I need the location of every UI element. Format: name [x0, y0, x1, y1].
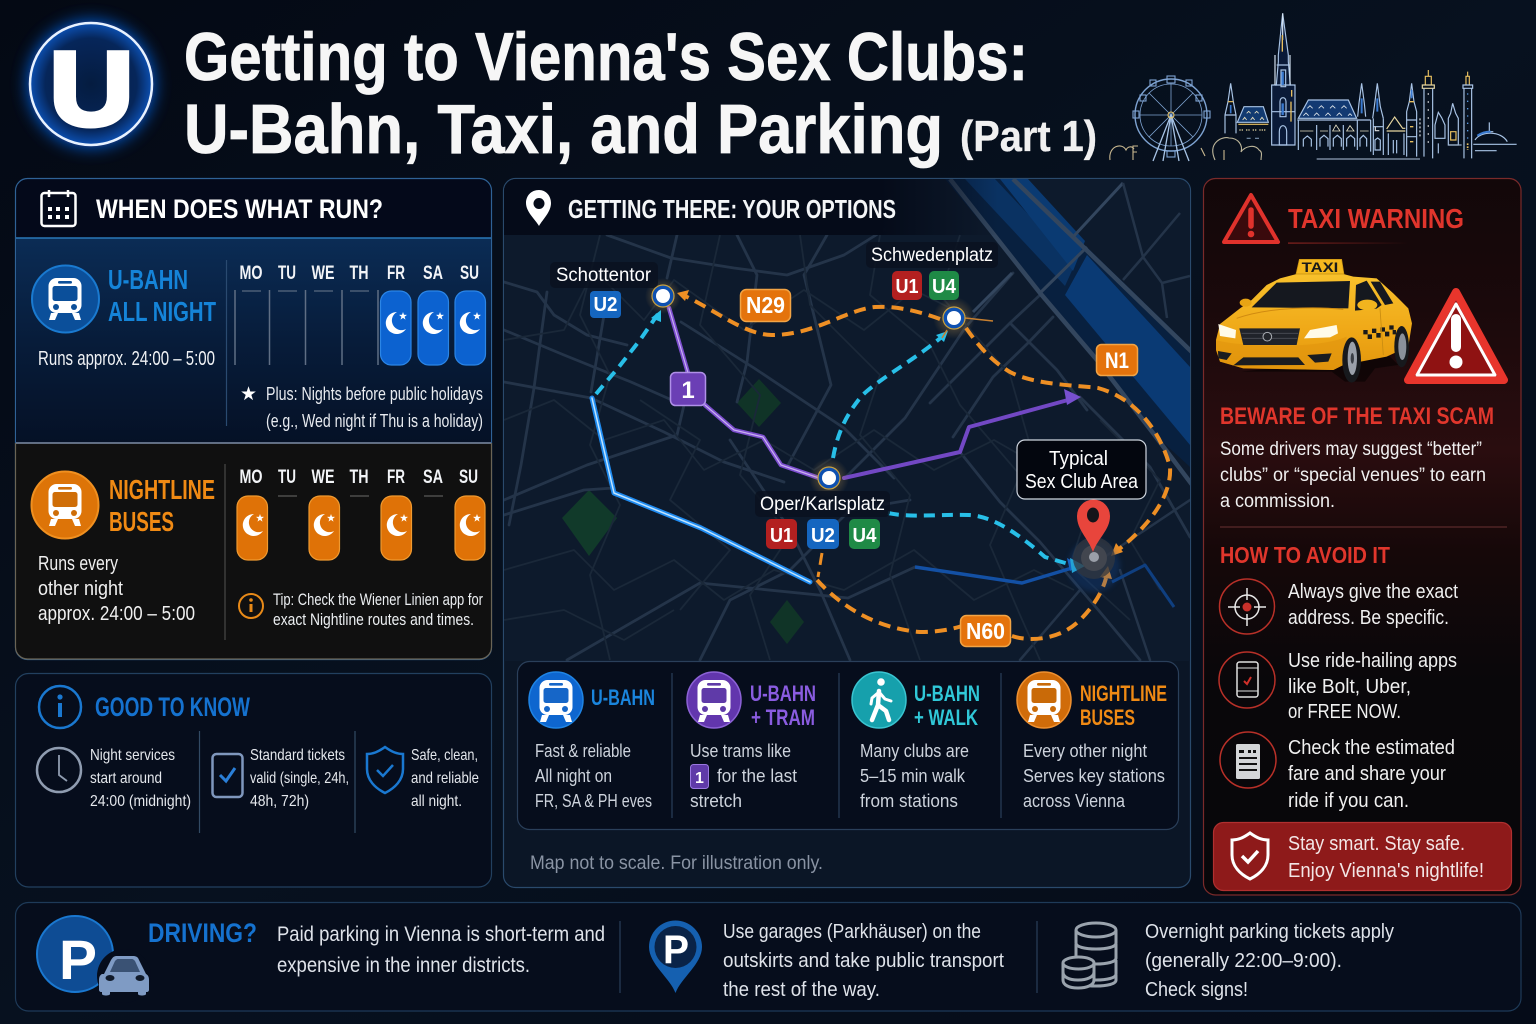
text: Nightline frequency: Runs every: [38, 553, 118, 575]
left tower and roof: [1225, 83, 1236, 133]
day labels: TU: [278, 467, 296, 488]
text: Nightline frequency: other night: [38, 578, 123, 600]
legend: U-Bahn plus walk: from stations: [860, 791, 958, 811]
heading: when does what run: WHEN DOES WHAT RUN?: [96, 194, 383, 224]
day labels: SA: [423, 467, 443, 488]
day labels: MO: [240, 263, 262, 284]
text: scam description: Some drivers may suggest “better”: [1220, 438, 1482, 460]
text: night services: Night services: [90, 747, 175, 764]
day labels: SA: [423, 263, 443, 284]
text: safety: and reliable: [411, 770, 479, 787]
callout: stay safe: [1214, 822, 1512, 890]
badge: N29: N29: [746, 292, 785, 318]
note: map disclaimer: Map not to scale. For illustration only.: [530, 853, 823, 874]
icon: parking with car: [37, 916, 151, 1003]
badge: N60: N60: [966, 618, 1005, 644]
station: Oper/Karlsplatz: U2: [811, 525, 835, 547]
text: Nightline frequency: [38, 553, 195, 625]
text: scam description: clubs” or “special venues” to earn: [1220, 464, 1486, 486]
icon: Nightline bus: [32, 472, 98, 538]
day labels: TH: [350, 263, 368, 284]
marker: typical club area: Typical: [1049, 448, 1108, 470]
route: inner blue to club area: [915, 558, 1174, 607]
legend: U-Bahn plus walk: Many clubs are: [860, 741, 969, 761]
route: Nightline orange dashed: [685, 296, 1170, 639]
legend: U-Bahn plus tram: + TRAM: [751, 705, 815, 730]
legend: U-Bahn plus tram: stretch: [690, 791, 742, 811]
text: safety: [411, 747, 479, 810]
map: street network: [504, 230, 1190, 660]
legend: U-Bahn: FR, SA & PH eves: [535, 791, 652, 811]
day labels: FR: [387, 467, 405, 488]
label: Nightline buses: BUSES: [109, 506, 174, 537]
tip: estimated fare: Check the estimated: [1288, 737, 1455, 759]
text: garages: the rest of the way.: [723, 978, 880, 1001]
icon: ticket tablet: [212, 754, 242, 797]
heading: getting there: GETTING THERE: YOUR OPTIONS: [568, 194, 896, 224]
legend: U-Bahn plus walk: 5–15 min walk: [860, 766, 966, 786]
icon: location pin: [526, 190, 551, 226]
note: app tip: exact Nightline routes and times.: [273, 610, 474, 629]
title: [184, 19, 1097, 168]
icon: walking person: [871, 678, 891, 720]
legend: Nightline buses: Every other night: [1023, 741, 1147, 761]
day labels: FR: [387, 263, 405, 284]
label: U-Bahn all night: ALL NIGHT: [108, 296, 216, 327]
icon: calendar: [42, 190, 76, 226]
day labels: WE: [312, 263, 334, 284]
icon: info: [39, 686, 81, 728]
route: tram purple: [669, 308, 1081, 478]
illustration: yellow taxi: [1216, 259, 1412, 383]
legend: U-Bahn plus walk: [852, 672, 980, 811]
tip: exact address: [1220, 579, 1458, 634]
legend: U-Bahn plus walk: U-BAHN: [914, 681, 980, 706]
text: garages: outskirts and take public transport: [723, 949, 1004, 972]
text: tickets: valid (single, 24h,: [250, 770, 349, 787]
tip: estimated fare: [1220, 732, 1455, 812]
icon: large warning triangle: [1408, 292, 1504, 380]
route: walking cyan dashed: [596, 314, 1072, 565]
badge: N1: [1096, 344, 1138, 376]
text: garages: Use garages (Parkhäuser) on the: [723, 920, 981, 943]
title: (Part 1): [960, 112, 1097, 161]
panel: getting there map: [504, 178, 1196, 888]
arrowheads: orange: [677, 290, 1123, 579]
heading: driving: DRIVING?: [148, 918, 257, 948]
badge: N29: [740, 290, 790, 322]
day labels: TU: [278, 263, 296, 284]
station: Schwedenplatz: U4: [932, 276, 957, 298]
day labels: MO: [240, 467, 262, 488]
map: base and water: [504, 179, 1190, 661]
note: public holidays: ★: [240, 384, 257, 405]
note: public holidays: (e.g., Wed night if Thu is a holiday): [266, 411, 483, 431]
tip: ride-hailing apps: like Bolt, Uber,: [1288, 676, 1411, 698]
text: scam description: a commission.: [1220, 490, 1335, 512]
text: tickets: Standard tickets: [250, 747, 345, 764]
text: overnight tickets: (generally 22:00–9:00).: [1145, 949, 1342, 972]
text: night services: start around: [90, 770, 162, 787]
text: scam description: [1220, 438, 1486, 512]
station: Oper/Karlsplatz: [755, 458, 890, 549]
note: app tip: [273, 590, 483, 629]
tall tower one: [1425, 70, 1431, 85]
title: Getting to Vienna's Sex Clubs:: [184, 19, 1028, 95]
heading: good to know: GOOD TO KNOW: [95, 692, 250, 722]
day labels: WE: [312, 467, 334, 488]
dome: [1475, 122, 1507, 142]
icon: parking pin: P: [663, 928, 689, 972]
icon: parking pin: [649, 921, 702, 993]
icon: shield: [367, 747, 403, 793]
day labels: [240, 263, 479, 284]
text: tickets: 48h, 72h): [250, 793, 309, 810]
label: U-Bahn all night: U-BAHN: [108, 264, 188, 295]
illustration: Vienna skyline: [1110, 13, 1517, 161]
tip: ride-hailing apps: Use ride-hailing apps: [1288, 650, 1457, 672]
tip: ride-hailing apps: [1219, 650, 1457, 723]
night pills: Nightline: [237, 496, 485, 560]
text: Nightline frequency: approx. 24:00 – 5:00: [38, 603, 195, 625]
map: river roads: [950, 179, 1196, 490]
text: tickets: [250, 747, 349, 810]
legend: U-Bahn: Fast & reliable: [535, 741, 631, 761]
day labels: [240, 467, 478, 488]
title: U-Bahn, Taxi, and Parking: [184, 90, 943, 168]
station: Schwedenplatz: [866, 242, 998, 339]
legend: U-Bahn: U-BAHN: [591, 685, 655, 710]
badge: N1: N1: [1105, 348, 1129, 373]
note: public holidays: Plus: Nights before public holidays: [266, 384, 483, 404]
route: U-Bahn solid blue: [592, 398, 810, 582]
label: U-Bahn all night: [108, 264, 216, 327]
heading: taxi warning: TAXI WARNING: [1288, 203, 1464, 234]
station: Oper/Karlsplatz: Oper/Karlsplatz: [760, 494, 885, 515]
arrowheads: cyan: [651, 310, 1085, 573]
heading: how to avoid it: HOW TO AVOID IT: [1220, 542, 1390, 568]
legend: U-Bahn plus tram: [687, 672, 816, 811]
legend: Nightline buses: NIGHTLINE: [1080, 681, 1167, 706]
station: Schottentor: [550, 262, 681, 318]
station: Oper/Karlsplatz: U1: [770, 525, 793, 547]
icon: U-Bahn train: [32, 266, 99, 332]
icon: clock: [37, 748, 81, 792]
text: overnight tickets: Check signs!: [1145, 978, 1248, 1001]
text: night services: [90, 747, 191, 810]
legend: U-Bahn: All night on: [535, 766, 612, 786]
note: public holidays: [240, 384, 483, 431]
illustration: yellow taxi: TAXI: [1302, 259, 1338, 275]
text: safety: all night.: [411, 793, 462, 810]
station: Schottentor: Schottentor: [556, 265, 652, 286]
text: night services: 24:00 (midnight): [90, 793, 191, 810]
checker pattern: [1363, 325, 1396, 339]
panel: good to know: [16, 674, 492, 887]
text: paid parking: [277, 923, 605, 977]
panel: when does what run: [16, 178, 492, 660]
tip: estimated fare: ride if you can.: [1288, 790, 1409, 812]
icon: coin stacks: [1063, 923, 1116, 988]
callout: stay safe: Enjoy Vienna's nightlife!: [1288, 860, 1484, 882]
legend: Nightline buses: [1017, 672, 1167, 811]
tip: exact address: Always give the exact: [1288, 581, 1458, 603]
panel: driving and parking: [16, 902, 1521, 1011]
text: paid parking: Paid parking in Vienna is short-term and: [277, 923, 605, 946]
cathedral: [1272, 13, 1295, 145]
legend: Nightline buses: across Vienna: [1023, 791, 1126, 811]
station: Oper/Karlsplatz: U4: [852, 525, 877, 547]
text: safety: Safe, clean,: [411, 747, 478, 764]
panel: taxi warning: [1204, 178, 1521, 895]
section: U-Bahn all night: [32, 260, 486, 431]
icon: ferris wheel: [1133, 76, 1210, 161]
text: overnight tickets: Overnight parking tickets apply: [1145, 920, 1395, 943]
tip: exact address: address. Be specific.: [1288, 607, 1449, 629]
marker: typical club area: [1017, 440, 1146, 592]
icon: U-Bahn logo: U: [50, 31, 134, 148]
town hall: [1298, 100, 1357, 118]
station: Schottentor: U2: [594, 294, 618, 316]
icon: parking with car: P: [59, 928, 97, 991]
day labels: SU: [459, 467, 478, 488]
day labels: TH: [350, 467, 368, 488]
east buildings: [1387, 117, 1405, 131]
legend box: [518, 662, 1178, 830]
station: Schwedenplatz: U1: [896, 276, 918, 298]
badge: tram 1: 1: [681, 377, 695, 404]
text: overnight tickets: [1145, 920, 1395, 1001]
station: Schwedenplatz: Schwedenplatz: [871, 245, 993, 266]
tip: ride-hailing apps: or FREE NOW.: [1288, 701, 1401, 723]
icon: cathedral and town hall: [1225, 13, 1517, 159]
badge: tram 1: [670, 372, 706, 406]
night pills: U-Bahn: [380, 291, 486, 365]
note: app tip: Tip: Check the Wiener Linien app for: [273, 590, 483, 609]
text: garages: [723, 920, 1004, 1001]
label: Nightline buses: NIGHTLINE: [109, 474, 215, 505]
legend: Nightline buses: Serves key stations: [1023, 766, 1165, 786]
legend: U-Bahn plus tram: U-BAHN: [750, 681, 816, 706]
legend: U-Bahn plus tram: for the last: [717, 766, 797, 786]
tip: estimated fare: fare and share your: [1288, 763, 1446, 785]
marker: typical club area: Sex Club Area: [1025, 471, 1139, 493]
legend: U-Bahn plus tram: 1: [695, 770, 704, 787]
legend: U-Bahn: [529, 672, 655, 811]
day labels: SU: [460, 263, 479, 284]
text: paid parking: expensive in the inner districts.: [277, 954, 530, 977]
section: Nightline buses: [32, 464, 485, 640]
text: U-Bahn hours: Runs approx. 24:00 – 5:00: [38, 348, 215, 370]
icon: U-Bahn logo: [27, 20, 155, 148]
legend: U-Bahn plus walk: + WALK: [914, 705, 978, 730]
icon: warning triangle: [1224, 195, 1278, 242]
callout: stay safe: Stay smart. Stay safe.: [1288, 833, 1465, 855]
icon: tip info: [239, 594, 263, 618]
icon: trees: [1110, 138, 1262, 160]
legend: Nightline buses: BUSES: [1080, 705, 1135, 730]
tall tower two: [1466, 72, 1469, 85]
label: Nightline buses: [109, 474, 215, 537]
legend: U-Bahn plus tram: Use trams like: [690, 741, 791, 761]
